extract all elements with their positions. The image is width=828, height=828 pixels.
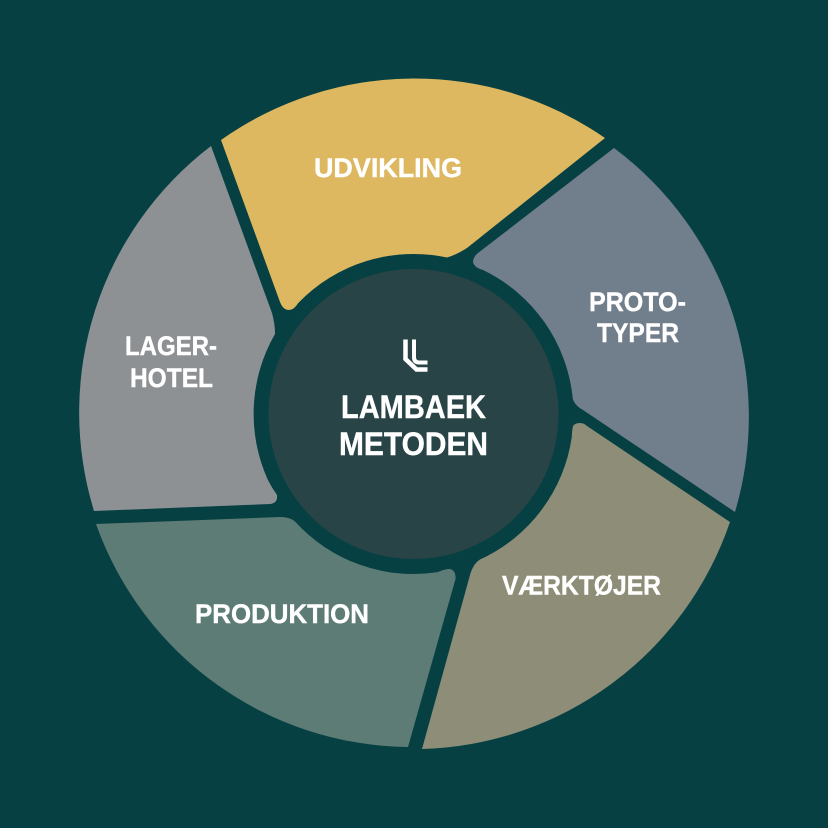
centre title: METODEN xyxy=(339,426,488,462)
panel: lagerhotel xyxy=(79,146,277,511)
panel: vaerktoejer xyxy=(422,423,730,749)
centre circle xyxy=(268,269,558,559)
icon: lambaek logo xyxy=(406,340,428,370)
panel: prototyper xyxy=(473,148,749,512)
label: prototyper: PROTO- xyxy=(589,287,686,317)
panel: produktion xyxy=(96,517,456,747)
panel: udvikling xyxy=(221,79,605,310)
label: lagerhotel: LAGER- xyxy=(125,331,217,361)
label: lagerhotel: HOTEL xyxy=(130,363,213,393)
label: prototyper: TYPER xyxy=(597,318,679,348)
centre title: LAMBAEK xyxy=(341,389,486,425)
label: produktion: PRODUKTION xyxy=(195,599,369,629)
label: vaerktoejer: VÆRKTØJER xyxy=(502,570,661,600)
label: udvikling: UDVIKLING xyxy=(314,153,462,183)
